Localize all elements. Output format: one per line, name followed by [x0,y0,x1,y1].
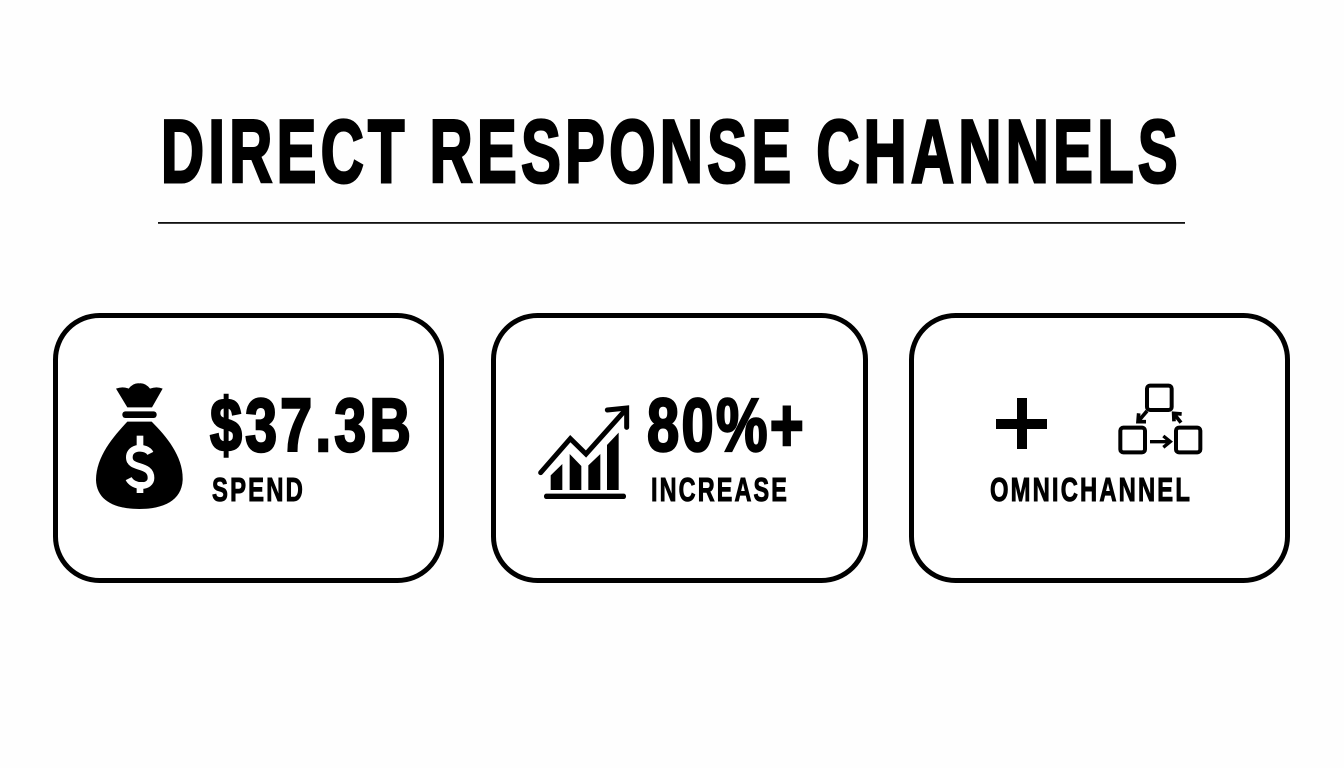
panel: increase [494,316,866,580]
icon: growth chart [541,408,627,499]
stat: 80%+: 80%+ [647,383,806,467]
icon: money bag [96,383,183,509]
stat: $37.3B: $37.3B [210,383,414,467]
label: omnichannel: OMNICHANNEL [990,471,1192,508]
label: increase: INCREASE [651,471,789,508]
label: spend: SPEND [212,471,305,508]
panel: spend [56,316,442,580]
panel: omnichannel [912,316,1288,580]
icon: plus [996,398,1047,449]
icon: connected channels [1120,386,1200,452]
